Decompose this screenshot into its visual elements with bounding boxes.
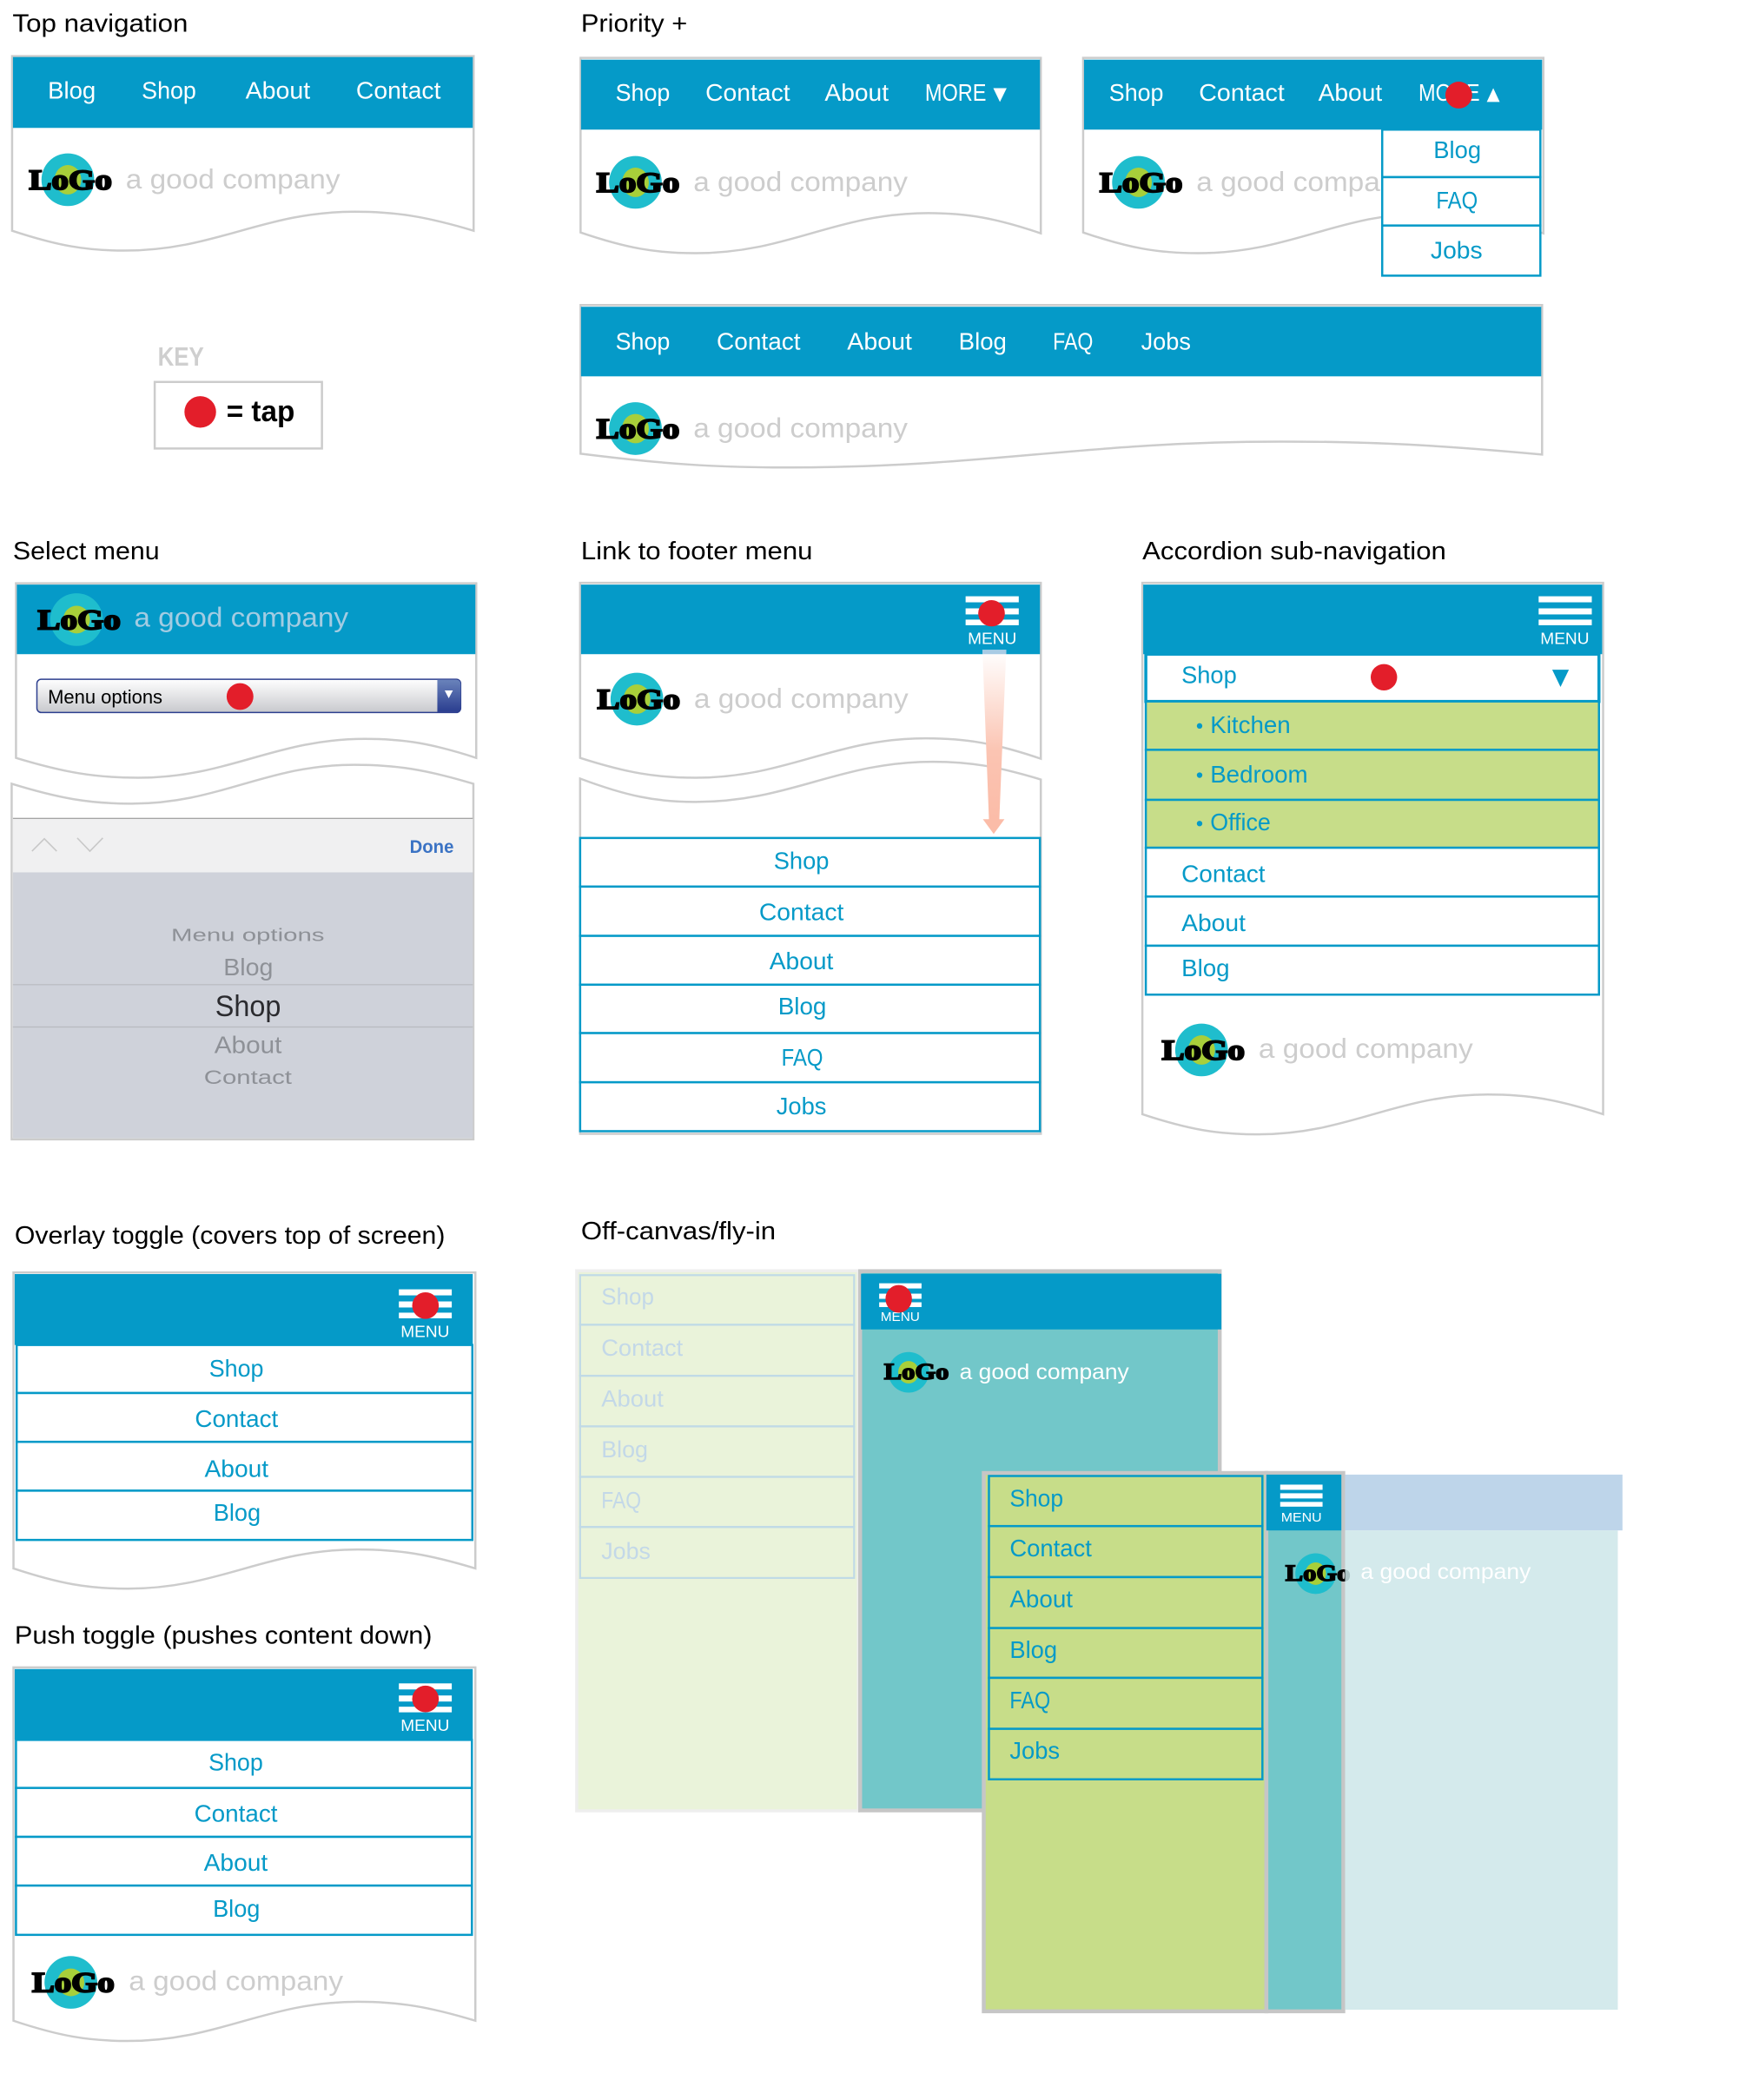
menu pane: FAQ — [1009, 1687, 1050, 1714]
logo: LoGo — [29, 165, 112, 196]
logo: LoGo — [597, 413, 679, 445]
tap marker — [885, 1285, 912, 1312]
menu rows: Contact — [195, 1405, 279, 1432]
tap marker — [413, 1292, 439, 1319]
logo: LoGo — [597, 168, 679, 199]
toolbar: Done — [410, 837, 453, 857]
panel: accordion sub-navigation — [1142, 583, 1604, 1134]
menu rows — [16, 1740, 472, 1935]
panel: overlay toggle — [14, 1272, 475, 1588]
accordion rows: Kitchen — [1210, 711, 1291, 738]
accordion rows: About — [1181, 909, 1246, 936]
nav items: Jobs — [1141, 327, 1191, 354]
tap marker — [413, 1686, 439, 1713]
nav items: MORE — [925, 79, 987, 106]
menu rows: Shop — [208, 1748, 263, 1775]
header bar — [1143, 584, 1602, 654]
nav items: Contact — [1199, 79, 1285, 106]
nav bar — [581, 60, 1040, 129]
key — [155, 341, 322, 448]
header bar — [15, 1669, 473, 1740]
nav items: About — [824, 79, 889, 106]
picker wheel: Menu options — [171, 926, 325, 945]
nav items — [1109, 79, 1500, 106]
menu rows — [17, 1345, 473, 1540]
toolbar — [13, 818, 473, 872]
heading: Top navigation: Top navigation — [12, 10, 188, 37]
logo mark — [1286, 1554, 1350, 1594]
logo: a good company — [960, 1360, 1129, 1384]
key: = tap — [227, 395, 294, 428]
logo: a good company — [126, 163, 341, 195]
menu pane — [984, 1473, 1266, 2011]
nav items: Blog — [959, 327, 1007, 354]
main content pane — [860, 1271, 1220, 1811]
footer menu rows: Shop — [774, 847, 829, 874]
nav items: About — [246, 76, 310, 103]
logo: LoGo — [1100, 168, 1182, 199]
hidden menu pane: Shop — [601, 1284, 654, 1310]
panel: select picker — [11, 765, 473, 1139]
header bar — [1266, 1475, 1341, 1530]
menu icon: MENU — [400, 1717, 449, 1735]
accordion rows: Bedroom — [1210, 761, 1308, 788]
logo: a good company — [693, 412, 908, 443]
footer menu rows: Blog — [778, 993, 826, 1020]
off-screen content: a good company — [1360, 1560, 1531, 1584]
menu pane: About — [1009, 1586, 1073, 1613]
heading: Push toggle: Push toggle (pushes content down) — [15, 1622, 433, 1650]
nav items: Shop — [616, 79, 670, 106]
hidden menu pane: Contact — [601, 1335, 684, 1361]
logo — [1161, 1024, 1473, 1076]
nav items: About — [1319, 79, 1382, 106]
logo: LoGo — [32, 1968, 115, 1999]
hidden menu pane: Blog — [601, 1436, 648, 1463]
tap marker — [978, 600, 1005, 626]
nav items — [616, 327, 1191, 354]
footer menu rows: Jobs — [777, 1093, 826, 1119]
footer menu rows — [580, 838, 1040, 1131]
nav bar — [13, 57, 473, 128]
menu icon — [1538, 597, 1592, 648]
logo: LoGo — [597, 684, 680, 716]
menu pane: Shop — [1009, 1484, 1063, 1511]
menu rows: Contact — [195, 1800, 278, 1826]
panel: off-canvas open state — [984, 1473, 1623, 2011]
header bar — [581, 584, 1040, 654]
menu icon: MENU — [400, 1324, 449, 1342]
menu rows: Blog — [214, 1499, 261, 1526]
panel: select menu page — [16, 584, 476, 778]
logo mark: LoGo — [1286, 1561, 1350, 1586]
tap marker — [227, 683, 254, 710]
nav items: Contact — [356, 76, 441, 103]
picker wheel: Shop — [215, 990, 281, 1023]
logo — [597, 673, 909, 725]
heading: Off-canvas/fly-in: Off-canvas/fly-in — [581, 1218, 776, 1245]
select control — [36, 679, 460, 712]
heading: Link to footer menu: Link to footer menu — [581, 538, 813, 565]
tap marker — [1445, 82, 1472, 109]
picker wheel: Contact — [204, 1067, 292, 1088]
footer menu rows: FAQ — [782, 1044, 823, 1071]
menu icon — [1280, 1484, 1323, 1525]
logo: a good company — [694, 683, 909, 714]
accordion rows: Blog — [1181, 954, 1230, 981]
panel: push toggle — [14, 1667, 475, 2041]
picker wheel: Blog — [223, 954, 273, 981]
heading: Accordion sub-navigation: Accordion sub-navigation — [1142, 538, 1446, 565]
hidden menu pane — [577, 1271, 858, 1811]
nav items — [616, 79, 1007, 106]
menu rows: About — [205, 1455, 268, 1482]
hidden menu pane: FAQ — [601, 1487, 641, 1513]
menu icon — [966, 597, 1019, 648]
menu pane: Contact — [1009, 1535, 1092, 1562]
select control: Menu options — [48, 686, 162, 708]
menu icon — [399, 1683, 452, 1735]
nav items: Contact — [717, 327, 801, 354]
accordion rows: Shop — [1181, 661, 1237, 688]
main content pane — [1266, 1473, 1343, 2011]
hidden menu pane: About — [601, 1385, 664, 1411]
panel: priority plus collapsed — [580, 58, 1041, 254]
logo: LoGo — [884, 1359, 949, 1384]
menu icon: MENU — [881, 1310, 920, 1324]
logo: a good company — [1196, 166, 1411, 197]
picker wheel — [13, 872, 473, 1138]
footer menu rows: About — [770, 948, 834, 974]
panel: off-canvas closed state — [577, 1271, 1221, 1811]
heading: Select menu: Select menu — [13, 538, 160, 565]
menu icon: MENU — [1540, 630, 1590, 648]
heading: Priority +: Priority + — [581, 10, 687, 37]
menu icon — [399, 1290, 452, 1342]
heading: Overlay toggle: Overlay toggle (covers top of screen) — [15, 1222, 445, 1250]
nav bar — [1084, 60, 1542, 129]
accordion rows: Office — [1210, 809, 1271, 835]
logo — [597, 402, 908, 455]
panel: priority plus wide — [580, 305, 1542, 467]
nav items: Shop — [1109, 79, 1163, 106]
nav items: Shop — [142, 76, 196, 103]
nav items — [48, 76, 441, 103]
picker wheel: About — [215, 1032, 282, 1059]
nav items: FAQ — [1053, 327, 1093, 354]
menu rows: Blog — [213, 1895, 260, 1922]
logo: a good company — [693, 166, 908, 197]
dropdown menu: Blog — [1433, 136, 1481, 163]
header bar — [17, 584, 475, 654]
logo: a good company — [1259, 1033, 1473, 1064]
panel: top navigation — [12, 56, 473, 251]
menu icon: MENU — [1281, 1510, 1322, 1525]
nav items: Contact — [705, 79, 790, 106]
header bar — [15, 1274, 473, 1345]
logo — [37, 593, 348, 646]
key: KEY — [158, 341, 204, 372]
menu icon: MENU — [968, 630, 1016, 648]
logo: LoGo — [37, 604, 121, 636]
logo — [597, 156, 908, 208]
logo — [1100, 156, 1411, 208]
footer menu rows: Contact — [759, 898, 844, 925]
panel: priority plus expanded — [1083, 58, 1544, 275]
arrow — [982, 650, 1006, 834]
off-screen content — [1345, 1475, 1623, 2010]
accordion rows: Contact — [1181, 860, 1266, 887]
nav items: Blog — [48, 76, 96, 103]
dropdown menu: FAQ — [1436, 187, 1478, 214]
nav items: Shop — [616, 327, 670, 354]
logo — [32, 1956, 343, 2009]
menu pane: Jobs — [1009, 1737, 1060, 1764]
accordion rows — [1146, 654, 1599, 994]
logo — [884, 1352, 1129, 1392]
logo — [29, 154, 341, 206]
menu icon — [879, 1284, 922, 1324]
menu rows: About — [204, 1849, 268, 1876]
menu pane: Blog — [1009, 1636, 1057, 1663]
logo: a good company — [129, 1965, 343, 1997]
panel: link to footer menu — [580, 583, 1041, 1133]
nav items: About — [847, 327, 912, 354]
menu rows: Shop — [209, 1355, 263, 1382]
nav bar — [581, 307, 1541, 376]
logo: a good company — [134, 601, 348, 632]
nav items: MORE — [1418, 79, 1480, 106]
dropdown menu: Jobs — [1431, 237, 1483, 264]
logo: LoGo — [1161, 1035, 1245, 1067]
header bar — [861, 1274, 1221, 1330]
hidden menu pane: Jobs — [601, 1538, 651, 1564]
tap marker — [1371, 664, 1397, 690]
dropdown menu — [1382, 129, 1540, 275]
